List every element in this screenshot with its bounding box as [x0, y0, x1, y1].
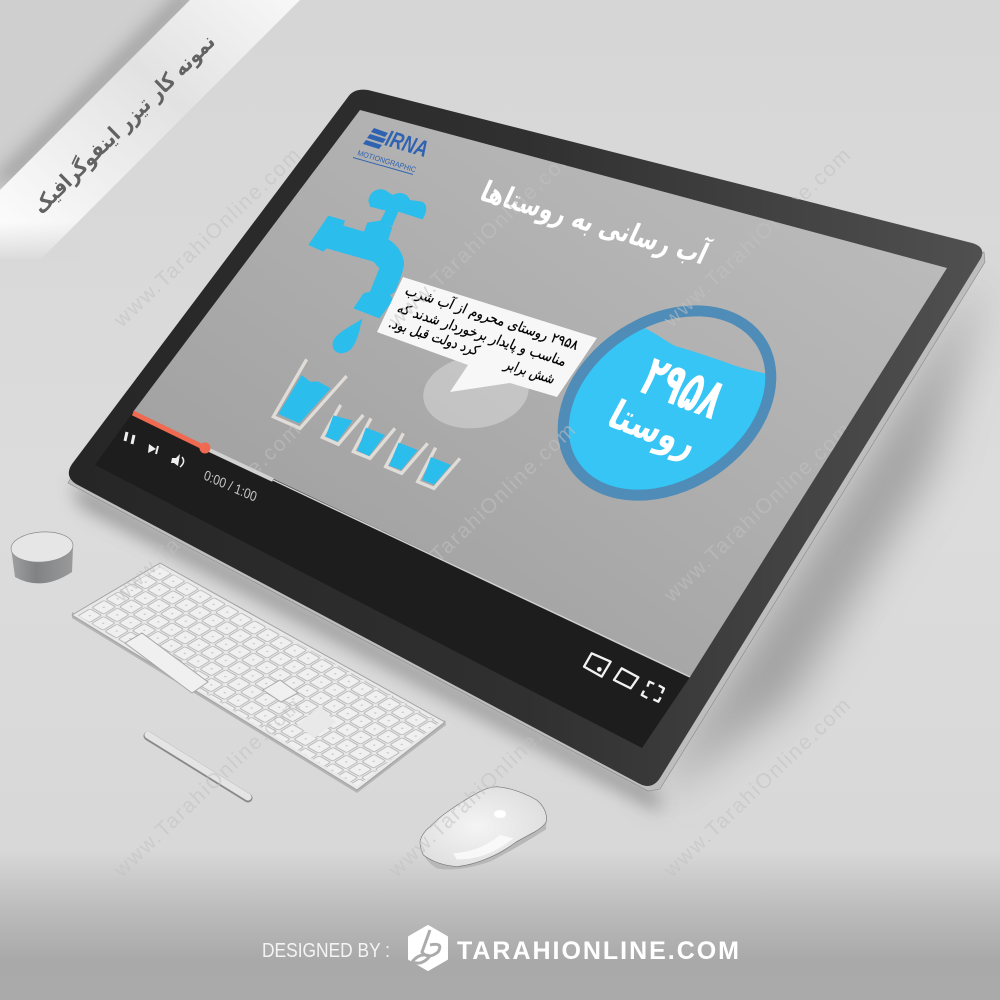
play button blob [419, 349, 533, 435]
icon: next [148, 444, 158, 454]
silver rim [68, 252, 985, 791]
callout text: کرد دولت قبل بود. [386, 315, 483, 359]
icon: picture in picture [584, 653, 611, 677]
progress bar [133, 413, 690, 677]
enter key [263, 680, 298, 702]
space bar [125, 633, 208, 693]
arrow gap [297, 706, 336, 738]
watermarks: www.TarahiOnline.com [659, 144, 855, 332]
screen [133, 110, 947, 677]
icon: water drop [333, 318, 363, 353]
stat number: ۲۹۵۸ [629, 344, 737, 432]
player controls [125, 432, 258, 506]
watermarks: www.TarahiOnline.com [384, 419, 580, 607]
glass large [273, 359, 347, 428]
icon: water faucet [308, 189, 426, 353]
window icons [584, 653, 664, 702]
dial knob [10, 530, 74, 583]
ribbon text: نمونه کار تیزر اینفوگرافیک [28, 29, 220, 218]
IRNA logo [353, 125, 432, 175]
callout [377, 277, 597, 397]
corner ribbon [0, 0, 300, 262]
logo bars [363, 128, 388, 149]
glass 3 [386, 433, 428, 473]
icon: volume [171, 454, 184, 467]
ring [528, 273, 806, 533]
logo subtitle: MOTIONGRAPHIC [356, 149, 417, 174]
monitor shadow [72, 270, 985, 812]
footer credit [262, 926, 739, 970]
watermarks: www.TarahiOnline.com [659, 419, 855, 607]
black control bar [95, 412, 690, 748]
watermarks: www.TarahiOnline.com [109, 144, 305, 332]
brand name: TARAHIONLINE.COM [457, 937, 739, 965]
watermarks: www.TarahiOnline.com [659, 694, 855, 882]
water fill [568, 328, 766, 490]
watermarks: www.TarahiOnline.com [384, 144, 580, 332]
mouse [420, 787, 547, 870]
callout text: مناسب و پایدار برخوردار شدند که [394, 300, 570, 371]
callout text: ۲۹۵۸ روستای محروم از آب شرب [402, 282, 582, 353]
glass 1 [322, 405, 363, 444]
watermarks: www.TarahiOnline.com [384, 694, 580, 882]
icon: theatre mode [614, 668, 638, 688]
stylus [148, 735, 248, 798]
keyboard [72, 563, 446, 793]
stat circle [558, 305, 776, 501]
watermarks [109, 144, 855, 882]
stat label: روستا [600, 393, 706, 466]
icon: fullscreen [642, 682, 664, 702]
monitor [68, 90, 985, 791]
glass 4 [418, 448, 460, 488]
bezel [69, 90, 982, 786]
callout text: شش برابر [501, 356, 558, 387]
icon: pause [125, 432, 134, 444]
icon: water glasses [273, 359, 460, 488]
logo wordmark: IRNA [382, 125, 432, 162]
watermarks: www.TarahiOnline.com [109, 694, 305, 882]
icon: brand hexagon [409, 926, 447, 970]
time text: 0:00 / 1:00 [202, 468, 258, 506]
keys [77, 567, 440, 786]
title: آب رسانی به روستاها [475, 173, 715, 272]
watermarks: www.TarahiOnline.com [109, 419, 305, 607]
designed by label: DESIGNED BY : [262, 940, 390, 962]
callout text [386, 282, 582, 387]
glass 2 [353, 418, 395, 458]
